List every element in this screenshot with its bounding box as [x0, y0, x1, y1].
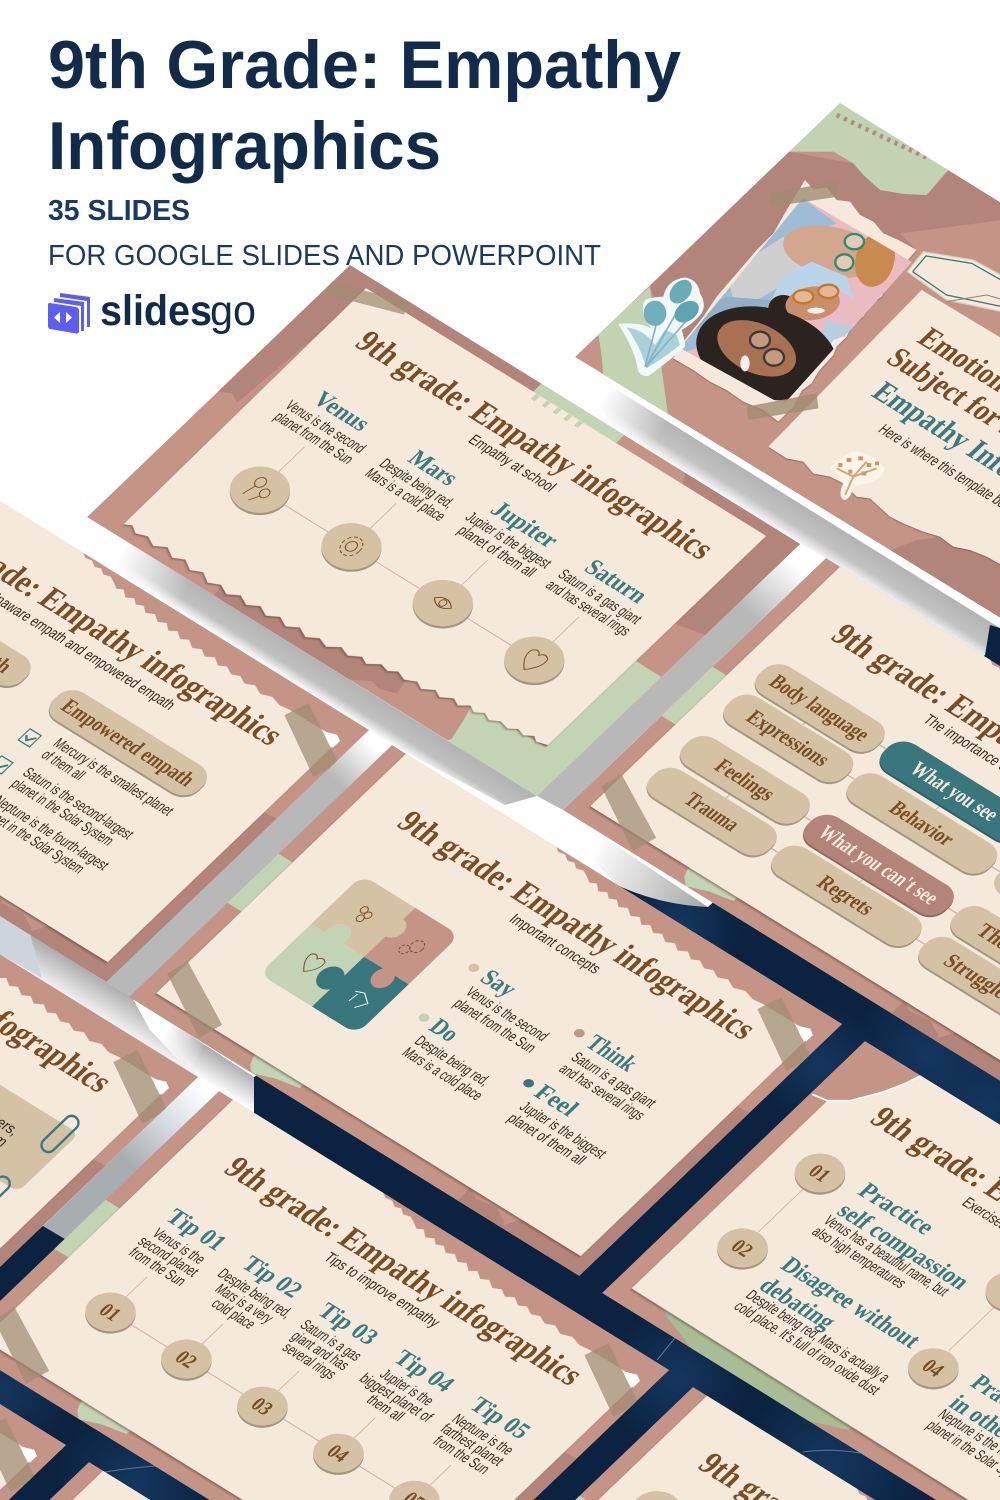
circle 01 [783, 1146, 857, 1203]
tip 05 [426, 1391, 539, 1480]
item: Feel: Jupiter is the biggest [515, 1099, 610, 1162]
item: Mars: Despite being red, [375, 456, 458, 512]
circle 05 [377, 1473, 451, 1500]
circle 01: 01 [803, 1161, 836, 1187]
item: Mars [364, 449, 456, 521]
tip 01: Venus is the [148, 1226, 209, 1268]
circle 04 [301, 1426, 375, 1483]
icon circle: gear sun [321, 523, 382, 572]
item: Feel: Feel [528, 1080, 585, 1122]
pill: body language: Body language [764, 670, 876, 746]
shadow band: lower left junction [0, 915, 198, 1077]
shadow band: above tips slide [43, 1077, 254, 1239]
title: 9th grade: Empathy infographics [390, 803, 765, 1046]
cream torn sheet [117, 288, 766, 774]
check item 2 [0, 750, 137, 854]
item: practice self compassion: also high temperatures [808, 1224, 910, 1292]
item: Jupiter [454, 502, 557, 578]
item: disagree without debating [730, 1251, 933, 1398]
icon: tulip sticker [618, 275, 704, 376]
item: Jupiter: planet of them all [453, 523, 539, 581]
slide: tips to improve empathy [0, 1091, 672, 1500]
timeline connectors [110, 1277, 451, 1500]
shadow band: below Venus slide [95, 520, 537, 805]
pill: what you see [871, 735, 1000, 850]
icon: tag sticker [907, 252, 1000, 313]
item: Venus: planet from the Sun [270, 410, 357, 468]
slide: important concepts puzzle [129, 745, 845, 1277]
pill: feelings: Feelings [709, 754, 781, 805]
subtitle: Tips to improve empathy [320, 1250, 444, 1331]
circle 03: 03 [246, 1394, 278, 1420]
white torn edge [812, 1043, 919, 1128]
shadow band: between Venus and body slides [537, 544, 826, 810]
icon circle: eye [412, 580, 473, 628]
circle 04: 04 [917, 1355, 949, 1381]
item: practice in others [922, 1370, 1000, 1500]
tip 03: Tip 03 [312, 1298, 384, 1350]
pill: expressions: Expressions [741, 705, 836, 771]
tip 02: cold place [207, 1296, 259, 1333]
item: Saturn: and has several rings [541, 578, 634, 639]
pill: expressions [714, 688, 862, 790]
icon circle: heart [504, 636, 564, 686]
header: platforms: FOR GOOGLE SLIDES AND POWERPOINT [48, 240, 601, 272]
check item 2: Saturn is the second-largest [19, 765, 137, 843]
item: Venus: Venus is the second [281, 398, 369, 457]
item: practice self compassion [808, 1177, 996, 1315]
green paper, lower right [448, 661, 662, 796]
circle 03 [974, 1264, 1000, 1321]
navy backdrop [0, 625, 1000, 1500]
subtitle: Empathy at school [464, 432, 559, 495]
puzzle [259, 875, 460, 1034]
tip 03: giant and has [287, 1329, 352, 1374]
item: disagree without debating: debating [753, 1273, 842, 1335]
logo: slidesgo: slides [100, 287, 212, 335]
header: slide count: 35 SLIDES [48, 195, 190, 227]
header: title: 9th Grade: Empathy [48, 27, 681, 103]
cover: right panel and stickers [618, 182, 1000, 567]
check item 3 [0, 778, 112, 885]
item: Say: Venus is the second [461, 985, 551, 1045]
check item 2: planet in the Solar System [7, 776, 117, 849]
connectors [711, 708, 1000, 944]
tape [320, 282, 408, 315]
green strip [642, 1301, 855, 1439]
item: Jupiter: Jupiter is the biggest [461, 510, 555, 572]
pill: thoughts [941, 900, 1000, 1002]
tip 02: Mars is a very [211, 1282, 277, 1327]
item: Do [385, 1006, 518, 1104]
item: Say: planet from the Sun [449, 996, 539, 1056]
icon: second paperclip [0, 1174, 13, 1214]
item: Say: Say [474, 965, 523, 1002]
item: Saturn: Saturn [578, 555, 654, 608]
tip 02: Tip 02 [236, 1251, 308, 1303]
item: practice self compassion: self compassion [831, 1198, 975, 1295]
slide: unaware and empowered empath [0, 502, 369, 982]
check item 1 [13, 721, 177, 831]
item: Venus [271, 390, 368, 464]
slide: Venus, empathy at school [82, 262, 800, 796]
circle 04 [896, 1340, 970, 1397]
circle 02 [706, 1221, 779, 1278]
green perforated drips [533, 396, 583, 427]
item: Mars: Mars is a cold place [361, 466, 449, 525]
tip 03: several rings [278, 1340, 340, 1383]
item: Do: Do [423, 1014, 465, 1047]
tip 02 [192, 1246, 317, 1342]
pill: unaware empath [0, 641, 31, 688]
shadow band: between empath and puzzle slides [106, 730, 392, 997]
item: disagree without debating: Disagree without [774, 1252, 926, 1354]
tip 03: Saturn is a gas [296, 1317, 365, 1364]
circle 04: 04 [322, 1441, 354, 1467]
item: Think [540, 1021, 681, 1124]
tip 04 [345, 1340, 469, 1436]
shadow band: puzzle lower edge [132, 997, 254, 1120]
item: Think: Think [580, 1030, 643, 1077]
circle 02: 02 [726, 1236, 758, 1261]
pill: feelings [671, 730, 819, 832]
subtitle: Important concepts [505, 912, 604, 977]
circle 02 [149, 1332, 223, 1389]
connectors [758, 1188, 995, 1350]
cover: top tape [768, 182, 838, 207]
cover: green paper top [788, 103, 948, 195]
item: Do: Despite being red, [410, 1034, 493, 1089]
check item 1: Mercury is the smallest planet [49, 736, 177, 819]
circle 01 [73, 1285, 147, 1342]
torn dark paper, top and left [218, 265, 542, 402]
cover: title text [834, 319, 1000, 552]
pill: regrets: Regrets [811, 871, 881, 920]
item: Saturn [546, 560, 644, 636]
slide: what you see diagram [563, 558, 1000, 1090]
circle 02: 02 [170, 1347, 202, 1373]
tip 04: biggest planet of [355, 1371, 437, 1426]
tip 01: from the Sun [125, 1245, 189, 1290]
cover: cream text panel [768, 290, 1000, 567]
pill: what you can't see: What you can't see [813, 821, 945, 909]
item: Feel [489, 1071, 630, 1174]
page curl: below body slide [553, 810, 708, 907]
slide: card with paperclip [0, 798, 201, 1330]
item: Think: and has several rings [555, 1062, 648, 1124]
circle 03 [225, 1379, 299, 1436]
pill: behavior [837, 767, 1000, 882]
cover: perforated edge [837, 115, 930, 159]
cover: dark paper bottom [890, 538, 1000, 618]
pill: top right [986, 858, 1000, 958]
beige card [0, 1017, 79, 1192]
title: 9th grade: Empathy infographics [348, 323, 723, 566]
item: Venus: Venus [307, 387, 376, 437]
check item 1: of them all [37, 748, 88, 784]
pill: behavior: Behavior [884, 796, 961, 850]
slide: exercises [602, 1041, 1000, 1500]
item: Do: Mars is a cold place [398, 1045, 486, 1104]
tip 04: them all [362, 1393, 407, 1425]
logo: slidesgo: go [210, 287, 256, 335]
icon: paperclip [39, 1113, 81, 1155]
circle [621, 1483, 692, 1500]
tip 05: from the Sun [429, 1434, 493, 1478]
cream sheet [629, 1050, 1000, 1500]
item: practice self compassion: Venus has a beautiful name, but [819, 1213, 952, 1300]
circle 01: 01 [94, 1300, 126, 1325]
header: title: Infographics [48, 108, 441, 184]
torn dark paper, bottom [214, 586, 406, 694]
header: title [48, 27, 681, 184]
tip 05: farthest planet [436, 1421, 507, 1469]
cover: green paper left [598, 287, 668, 417]
cover: dark torn paper [650, 152, 1000, 357]
pill: regrets [762, 840, 931, 954]
pill: trauma: Trauma [679, 788, 746, 836]
pill: trauma [638, 762, 786, 863]
slide: bottom centre [430, 1387, 1000, 1500]
icon: tree sticker [830, 452, 885, 500]
item: practice self compassion: Practice [852, 1178, 940, 1240]
cover: photo of three friends [680, 197, 912, 414]
title: 9th grade: Empathy infographics [217, 1149, 592, 1392]
shadow band: below cover [580, 366, 1000, 670]
item: disagree without debating: cold place. It's full of iron oxide dust [730, 1299, 883, 1398]
item: Feel: planet of them all [503, 1111, 589, 1169]
timeline connectors [278, 446, 580, 646]
item: Say [434, 956, 572, 1056]
tip 05: Tip 05 [463, 1392, 536, 1444]
tip 03 [274, 1297, 386, 1385]
item: disagree without debating: Despite being red, Mars is actually a [742, 1288, 893, 1386]
pill: struggles [909, 931, 1000, 1032]
icon circle: two faces [230, 466, 290, 516]
item: Jupiter: Jupiter [484, 497, 564, 553]
slide: bottom left corner [0, 1462, 542, 1500]
tip 01 [123, 1203, 234, 1291]
tip 01: second planet [134, 1234, 202, 1280]
tip 04: Tip 04 [388, 1345, 460, 1397]
tip 05: Neptune is the [448, 1412, 517, 1459]
item: Think: Saturn is a gas giant [567, 1050, 659, 1111]
tip 04: Jupiter is the [376, 1367, 437, 1409]
logo: slidesgo [48, 287, 256, 335]
item: Saturn: Saturn is a gas giant [554, 567, 645, 628]
item: Mars: Mars [402, 445, 464, 491]
slide: bottom left [0, 1166, 69, 1500]
tip 02: Despite being red, [213, 1266, 295, 1321]
green paper, top [533, 384, 624, 443]
cover: photo frame [673, 180, 917, 422]
pill: empowered empath: Empowered empath [56, 694, 201, 791]
pill: body language [746, 658, 894, 760]
cover: bottom tape [747, 393, 818, 420]
tip 01: Tip 01 [160, 1204, 232, 1256]
slide: cover [575, 103, 1000, 634]
torn dark paper, right [675, 472, 800, 635]
